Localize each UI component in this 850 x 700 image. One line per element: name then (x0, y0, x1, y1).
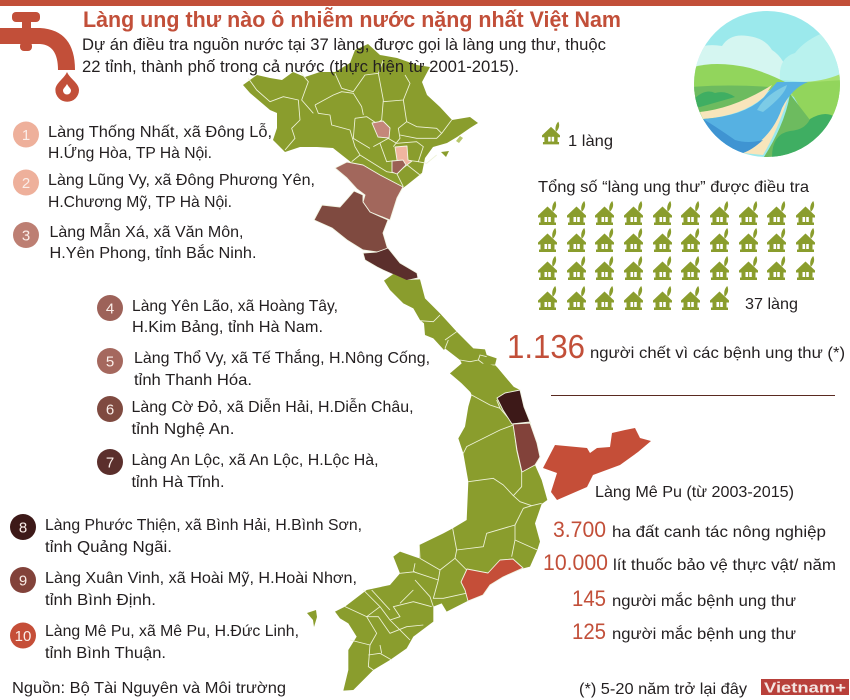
village 2: H.Chương Mỹ, TP Hà Nội. (48, 194, 232, 211)
village 8: 8 (19, 520, 27, 536)
village 5: 5 (106, 354, 114, 370)
illustration: river landscape (694, 11, 840, 157)
village 6: tỉnh Nghệ An. (132, 421, 234, 438)
footnote: (*) 5-20 năm trở lại đây (579, 681, 747, 698)
village 9: 9 (19, 572, 27, 590)
village 4: H.Kim Bảng, tỉnh Hà Nam. (132, 319, 323, 336)
stat: pesticide (543, 550, 836, 575)
legend: 1 village (542, 122, 613, 150)
village 3: Làng Mẫn Xá, xã Văn Môn, (50, 222, 244, 241)
intro text: 22 tỉnh, thành phố trong cả nước (thực hiện từ 2001-2015). (82, 58, 519, 76)
map: Bình Thuận (461, 559, 523, 601)
map: Phú Quốc island (307, 610, 317, 627)
map: Thanh Hóa (335, 162, 403, 220)
village 7 (97, 449, 378, 491)
logo: Vietnam+: Vietnam+ (764, 680, 846, 696)
village 9: Làng Xuân Vinh, xã Hoài Mỹ, H.Hoài Nhơn, (45, 570, 357, 587)
map: northern provinces (243, 44, 478, 188)
village 6: Làng Cờ Đỏ, xã Diễn Hải, H.Diễn Châu, (132, 397, 414, 416)
village 5: tỉnh Thanh Hóa. (134, 372, 252, 389)
village 5: Làng Thổ Vy, xã Tế Thắng, H.Nông Cống, (134, 348, 430, 367)
stat: 125: người mắc bệnh ung thư (612, 624, 796, 643)
stat: 125 (572, 619, 796, 644)
village 2: 2 (22, 175, 30, 192)
village 1: H.Ứng Hòa, TP Hà Nội. (48, 143, 212, 162)
village 10 (10, 622, 299, 662)
village 8: tỉnh Quảng Ngãi. (45, 539, 172, 556)
village 9: tỉnh Bình Định. (45, 592, 156, 609)
village 4 (97, 295, 338, 336)
map: Quảng Ngãi (497, 390, 530, 424)
intro text (82, 36, 606, 76)
intro text: Dự án điều tra nguồn nước tại 37 làng, được gọi là làng ung thư, thuộc (82, 36, 606, 54)
map: Nghệ An (314, 191, 388, 252)
village 5 (97, 348, 430, 389)
map: southern provinces (335, 363, 547, 691)
stat: 145: người mắc bệnh ung thư (612, 591, 796, 610)
village 6 (97, 396, 414, 438)
stat: pesticide: lít thuốc bảo vệ thực vật/ năm (613, 557, 836, 574)
enlarged province: Bình Thuận (543, 428, 651, 500)
stat: 1.136 deaths: 1.136 (507, 328, 585, 365)
map: Hà Nam (392, 160, 406, 174)
map: Hà Tĩnh (363, 248, 418, 281)
stat: 1.136 deaths (507, 328, 845, 365)
village 3: H.Yên Phong, tỉnh Bắc Ninh. (50, 243, 256, 262)
panel: Mê Pu stats (543, 484, 836, 644)
village 2: Làng Lũng Vy, xã Đông Phương Yên, (48, 172, 315, 189)
heading: total villages: Tổng số “làng ung thư” được điều tra (538, 178, 809, 196)
stat: 145 (572, 586, 796, 611)
stat: farmland: 3.700 (553, 517, 606, 542)
stat: 125: 125 (572, 619, 606, 644)
village 8 (10, 514, 362, 556)
source: Nguồn: Bộ Tài Nguyên và Môi trường (12, 680, 286, 697)
map: Hà Nội (395, 146, 412, 168)
map of Vietnam (243, 44, 547, 691)
village 3: 3 (22, 228, 30, 244)
village 8: Làng Phước Thiện, xã Bình Hải, H.Bình Sơn, (45, 517, 362, 534)
village 9 (10, 567, 357, 609)
heading: Mê Pu: Làng Mê Pu (từ 2003-2015) (595, 484, 794, 501)
stat: pesticide: 10.000 (543, 550, 608, 575)
title: Làng ung thư nào ô nhiễm nước nặng nhất Việt Nam (83, 7, 621, 32)
map: central provinces (384, 274, 515, 407)
map: Bình Định (513, 423, 540, 472)
village 7: Làng An Lộc, xã An Lộc, H.Lộc Hà, (132, 452, 378, 469)
top bar (0, 0, 850, 6)
village 1: Làng Thống Nhất, xã Đông Lỗ, (48, 122, 272, 141)
stat: 145: 145 (572, 586, 606, 611)
stat: 1.136 deaths: người chết vì các bệnh ung thư (*) (590, 345, 845, 362)
legend: 1 village: 1 làng (568, 133, 613, 150)
icon: water tap (0, 12, 79, 102)
pictogram: 37 villages: 37 làng (745, 296, 798, 313)
village 4: Làng Yên Lão, xã Hoàng Tây, (132, 298, 338, 315)
village 10: 10 (15, 628, 31, 645)
village 6: 6 (106, 402, 114, 418)
stat: farmland (553, 517, 826, 542)
village 3 (13, 222, 256, 262)
village 7: 7 (106, 454, 114, 472)
village 10: Làng Mê Pu, xã Mê Pu, H.Đức Linh, (45, 623, 299, 640)
village 1: 1 (22, 127, 30, 144)
map: Bắc Ninh (372, 121, 390, 138)
pictogram: 37 villages (538, 201, 815, 313)
village 4: 4 (106, 300, 114, 318)
stat: farmland: ha đất canh tác nông nghiệp (612, 524, 826, 541)
village 10: tỉnh Bình Thuận. (45, 645, 166, 662)
village 1 (13, 122, 272, 162)
village 2 (13, 170, 315, 211)
village 7: tỉnh Hà Tĩnh. (132, 474, 224, 491)
village list (10, 122, 430, 662)
